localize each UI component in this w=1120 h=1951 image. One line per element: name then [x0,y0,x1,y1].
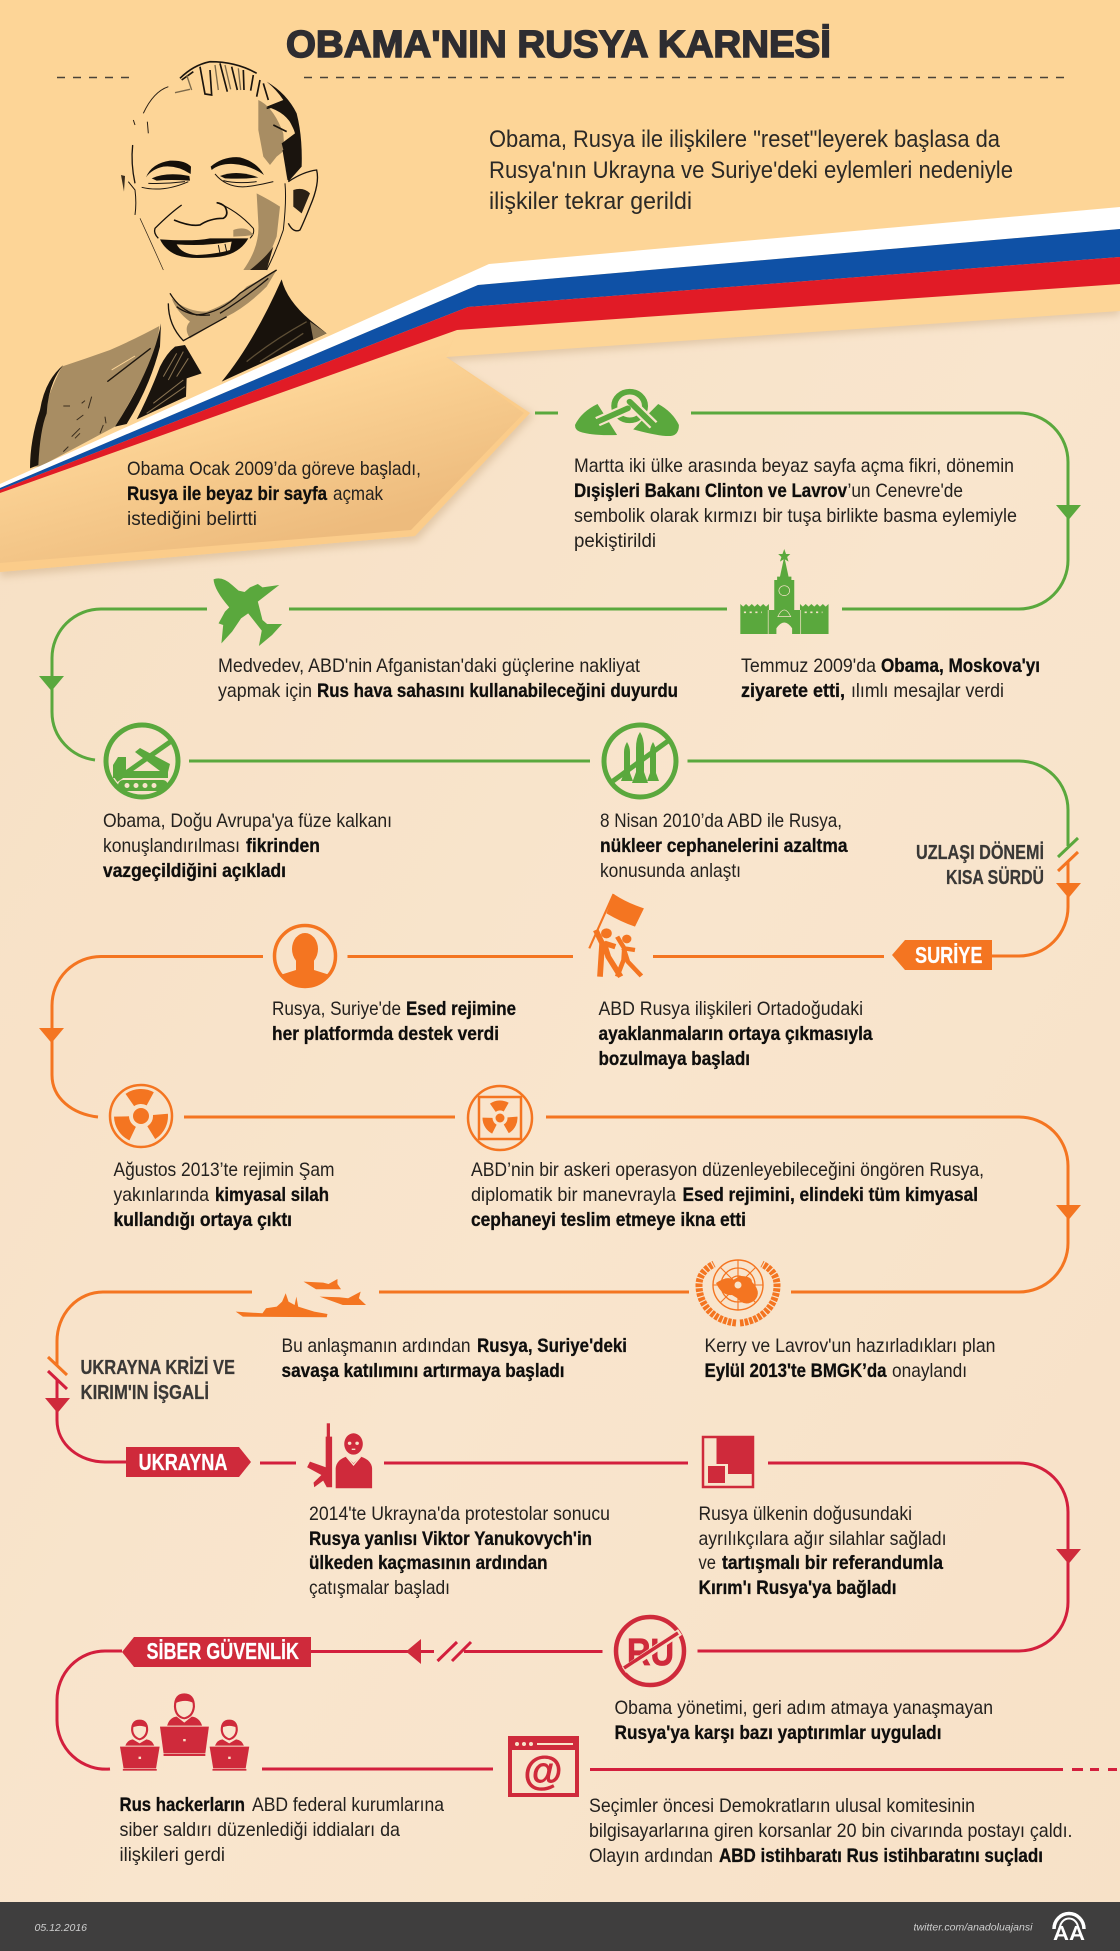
text: March reset: Martta iki ülke arasında beyaz sayfa açma fikri, dönemin [574,455,1014,477]
event: sanctions [614,1617,993,1744]
icon: reset button hands [575,392,679,436]
badge: Ukrayna: UKRAYNA [138,1449,228,1475]
icon: Crimea map [703,1437,753,1487]
event: chemical disarmament [468,1086,984,1231]
text: Moscow visit: ılımlı mesajlar verdi [851,680,1004,702]
text: missile shield: fikrinden [246,835,320,857]
icon: contained radiation [468,1086,532,1150]
icon: email window [510,1738,577,1795]
text: Russian hackers: Rus hackerların [120,1794,245,1816]
intro text [489,126,1013,215]
text: UN Security Council: Eylül 2013'te BMGK’da [704,1360,887,1382]
label: Ukraine crisis and Crimea occupation: UKRAYNA KRİZİ VE [80,1356,235,1379]
text: March reset: pekiştirildi [574,530,656,552]
text: Middle East uprisings [598,998,873,1070]
text: DNC email leak: Seçimler öncesi Demokratların ulusal komitesinin [589,1795,975,1817]
icon: warship and jets [236,1279,366,1317]
callout: pentagon gradient [0,330,524,563]
text: Crimea annexation: tartışmalı bir referandumla [722,1552,943,1574]
intro text: ilişkiler tekrar gerildi [489,188,692,215]
icon: UN emblem [699,1260,777,1323]
text: Crimea annexation [698,1503,946,1599]
text: Russian hackers: ilişkileri gerdi [120,1844,225,1866]
badge: Siber Güvenlik [122,1637,311,1667]
label: detente was short [916,841,1044,889]
text: chemical disarmament: ABD’nin bir askeri operasyon düzenleyebileceğini öngören Rusya, [471,1159,984,1181]
title rule [57,76,1068,78]
text: March reset [574,455,1017,552]
icon: Kremlin [740,549,829,634]
event: nuclear reduction [600,725,848,882]
text: missile shield: vazgeçildiğini açıkladı [103,860,286,882]
text: sanctions: Obama yönetimi, geri adım atmaya yanaşmayan [614,1697,993,1719]
text: Afghan airspace [218,655,678,702]
text: Crimea annexation: ve [698,1552,716,1574]
event: reset button [574,392,1017,552]
text: missile shield: Obama, Doğu Avrupa'ya füze kalkanı [103,810,392,832]
text: support for Assad: Rusya, Suriye'de [272,998,401,1020]
event: Russia joins Syrian war [236,1279,627,1382]
text: Crimea annexation: Rusya ülkenin doğusundaki [698,1503,912,1525]
text: chemical disarmament: Esed rejimini, elindeki tüm kimyasal [682,1184,978,1206]
text: Afghan airspace: Rus hava sahasını kullanabileceğini duyurdu [317,680,678,702]
connector: red timeline [45,1371,1117,1770]
connector: green timeline [39,413,1081,857]
portrait head [121,62,317,270]
text: chemical attack [114,1159,334,1231]
text: March reset: sembolik olarak kırmızı bir tuşa birlikte basma eylemiyle [574,505,1017,527]
connector: orange timeline [39,852,1081,1375]
text: Afghan airspace: Medvedev, ABD'nin Afganistan'daki güçlerine nakliyat [218,655,641,677]
text: Ukraine protests: Rusya yanlısı Viktor Yanukovych'in [309,1528,592,1550]
text: chemical attack: kullandığı ortaya çıktı [114,1209,292,1231]
text: Russian hackers: siber saldırı düzenlediği iddiaları da [120,1819,400,1841]
text: Russia joins Syrian war: savaşa katılımını artırmaya başladı [282,1360,564,1382]
event: chemical attack [110,1085,334,1231]
text: Ukraine protests: 2014'te Ukrayna'da protestolar sonucu [309,1503,610,1525]
event: Russian hackers [120,1694,444,1866]
text: DNC email leak: ABD istihbaratı Rus istihbaratını suçladı [719,1845,1043,1867]
text: nuclear reduction: nükleer cephanelerini azaltma [600,835,848,857]
text: Russian hackers: ABD federal kurumlarına [252,1794,444,1816]
badge: Suriye: SURİYE [915,942,982,968]
text: support for Assad [272,998,516,1045]
label: detente was short: UZLAŞI DÖNEMİ [916,841,1044,864]
header background [0,0,1120,572]
text: UN Security Council [704,1335,996,1382]
text: Middle East uprisings: ayaklanmaların ortaya çıkmasıyla [598,1023,873,1045]
text: Moscow visit: Temmuz 2009'da [741,655,876,677]
icon: Anadolu Agency logo [1053,1913,1085,1945]
text: Russia joins Syrian war: Bu anlaşmanın ardından [282,1335,470,1357]
text: Moscow visit [741,655,1040,702]
icon: hackers at laptops [120,1694,249,1771]
text: Obama took office [127,458,421,530]
icon: email window: @ [523,1749,563,1793]
label: Ukraine crisis and Crimea occupation [80,1356,235,1404]
text: chemical attack: kimyasal silah [215,1184,329,1206]
text: March reset: ’un Cenevre'de [848,480,963,502]
icon: crossed missiles [604,725,676,797]
text: Obama took office: Rusya ile beyaz bir sayfa [127,483,327,505]
text: chemical disarmament [471,1159,984,1231]
icon: crossed RU [616,1617,684,1685]
icon: Anadolu Agency logo: AA [1053,1923,1085,1945]
text: March reset: Dışişleri Bakanı Clinton ve Lavrov [574,480,847,502]
icon: radiation [110,1085,172,1147]
badge: Siber Güvenlik: SİBER GÜVENLİK [146,1638,299,1664]
intro text: Rusya'nın Ukrayna ve Suriye'deki eylemleri nedeniyle [489,157,1013,184]
text: DNC email leak [589,1795,1072,1867]
icon: crossed RU: RU [627,1632,674,1674]
label: detente was short: KISA SÜRDÜ [946,866,1044,889]
icon: person [272,924,338,988]
text: Russia joins Syrian war [282,1335,627,1382]
text: Ukraine protests: ülkeden kaçmasının ardından [309,1552,548,1574]
icon: protesters with flag [589,894,644,977]
footer [0,1902,1120,1951]
badge: Suriye [892,940,992,970]
text: Obama took office: Obama Ocak 2009’da göreve başladı, [127,458,421,480]
text: Crimea annexation: Kırım'ı Rusya'ya bağladı [698,1577,896,1599]
text: Moscow visit: Obama, Moskova'yı [881,655,1040,677]
text: nuclear reduction: konusunda anlaştı [600,860,741,882]
text: sanctions: Rusya'ya karşı bazı yaptırımlar uyguladı [614,1722,942,1744]
text: nuclear reduction: 8 Nisan 2010’da ABD ile Rusya, [600,810,842,832]
event: UN Security Council [699,1260,996,1382]
event: Crimea annexation [698,1437,946,1599]
event: Ukraine protests [307,1423,610,1599]
text: Afghan airspace: yapmak için [218,680,312,702]
text: DNC email leak: bilgisayarlarına giren korsanlar 20 bin civarında postayı çaldı. [589,1820,1072,1842]
text: chemical attack: Ağustos 2013’te rejimin Şam [114,1159,334,1181]
text: Obama took office: açmak [333,483,383,505]
footer date: 05.12.2016 [34,1922,87,1934]
text: chemical disarmament: cephaneyi teslim etmeye ikna etti [471,1209,746,1231]
text: Russian hackers [120,1794,444,1866]
Russian flag ribbon [0,207,1120,493]
event: Moscow visit [740,549,1040,702]
label: Ukraine crisis and Crimea occupation: KIRIM'IN İŞGALİ [80,1381,209,1404]
text: support for Assad: her platformda destek verdi [272,1023,499,1045]
icon: cancelled missile launcher [106,725,178,797]
portrait body and suit [30,270,327,468]
event: Afghan airspace [214,578,678,702]
text: DNC email leak: Olayın ardından [589,1845,713,1867]
text: Obama took office: istediğini belirtti [127,508,257,530]
text: UN Security Council: Kerry ve Lavrov'un hazırladıkları plan [704,1335,996,1357]
text: Crimea annexation: ayrılıkçılara ağır silahlar sağladı [698,1528,946,1550]
text: Russia joins Syrian war: Rusya, Suriye'deki [477,1335,627,1357]
text: Moscow visit: ziyarete etti, [741,680,845,702]
event: Middle East uprisings [589,894,873,1070]
illustration: Obama portrait [30,62,327,468]
event: DNC email leak [510,1738,1072,1867]
text: support for Assad: Esed rejimine [406,998,516,1020]
text: nuclear reduction [600,810,848,882]
text: missile shield: konuşlandırılması [103,835,240,857]
text: chemical disarmament: diplomatik bir manevrayla [471,1184,676,1206]
text: sanctions [614,1697,993,1744]
intro text: Obama, Rusya ile ilişkilere "reset"leyerek başlasa da [489,126,1001,153]
text: Middle East uprisings: ABD Rusya ilişkileri Ortadoğudaki [598,998,863,1020]
icon: masked gunman [307,1423,372,1488]
event: support for Assad [268,926,516,1045]
event: missile shield [103,725,392,882]
text: Ukraine protests [309,1503,610,1599]
text: UN Security Council: onaylandı [892,1360,967,1382]
title: OBAMA'NIN RUSYA KARNESİ [286,24,831,66]
pentagon background band [0,330,530,572]
text: missile shield [103,810,392,882]
text: Middle East uprisings: bozulmaya başladı [598,1048,750,1070]
text: Ukraine protests: çatışmalar başladı [309,1577,450,1599]
footer twitter handle: twitter.com/anadoluajansi [914,1922,1033,1934]
text: chemical attack: yakınlarında [114,1184,209,1206]
icon: plane [214,578,282,646]
